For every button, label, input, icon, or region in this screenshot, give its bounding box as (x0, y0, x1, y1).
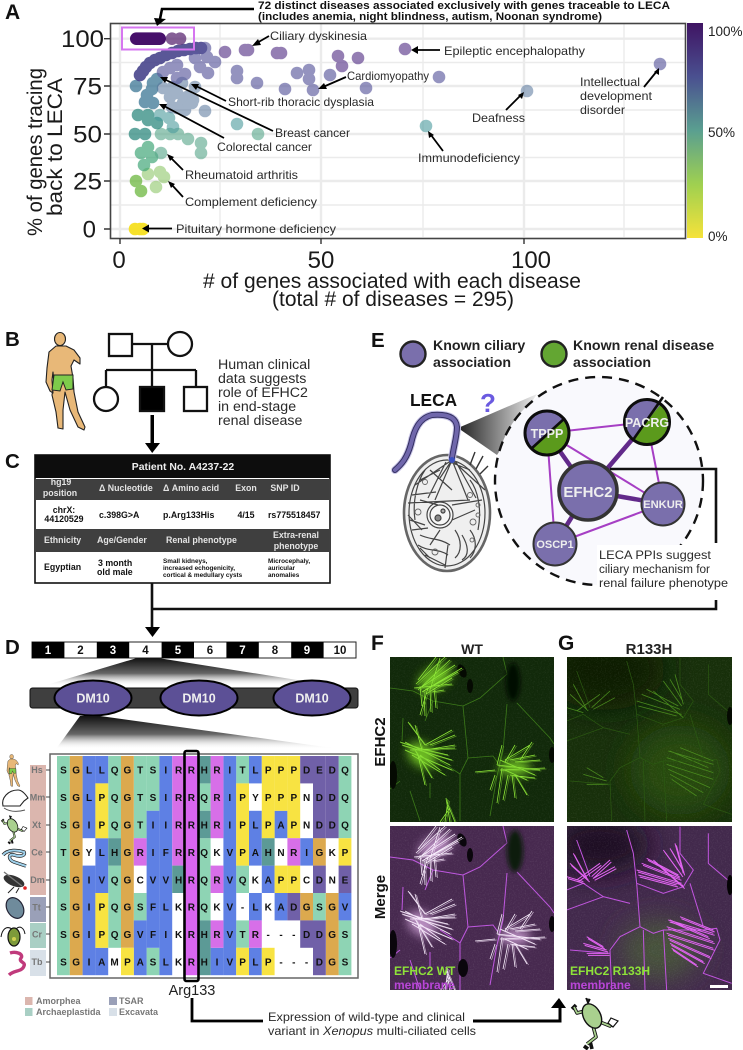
lineage strip and species labels: Tb (32, 957, 43, 967)
connector from EFHC2 to note (610, 469, 716, 543)
headline callout: 72 distinct diseases associated exclusively with genes traceable to LECA (258, 0, 670, 12)
protein bar (30, 688, 358, 708)
disease annotations: Immunodeficiency (418, 151, 520, 165)
table row: variant headings: Δ Amino acid (163, 483, 219, 493)
table row: variant values: p.Arg133His (163, 510, 214, 520)
headline callout: (includes anemia, night blindness, autism, Noonan syndrome) (258, 11, 602, 23)
alignment frame (50, 754, 358, 978)
table row: phenotype values: cortical & medullary cysts (163, 572, 243, 579)
icon: human figure (46, 332, 85, 430)
scatter points (129, 32, 666, 235)
y axis tick labels: 50 (73, 122, 102, 148)
y axis title (23, 68, 67, 236)
micrograph: R133H merge (567, 826, 732, 990)
table row: phenotype headings: phenotype (274, 541, 318, 551)
table row: phenotype values: 3 month (98, 558, 132, 568)
node: OSCP1: OSCP1 (536, 539, 574, 551)
legend: eukaryotic supergroups (25, 996, 159, 1017)
table row: variant values: 44120529 (44, 514, 84, 524)
text: clinical data: renal disease (218, 413, 303, 429)
x axis title (203, 269, 581, 311)
colour bar labels: 50% (708, 125, 735, 140)
micrograph: R133H EFHC2 (567, 657, 732, 822)
row label: Merge: Merge (372, 875, 389, 919)
alignment residues: SGIVQGCVVHRQRVQKAPPCDNE (60, 875, 349, 886)
text: expression note (268, 1010, 476, 1038)
table row: variant values: rs775518457 (268, 510, 320, 520)
node: TPPP: TPPP (531, 427, 563, 441)
y axis tick labels: 25 (73, 168, 102, 196)
axis ticks (104, 39, 524, 244)
micrograph: WT merge (389, 826, 555, 992)
micrograph overlay label: EFHC2 R133H: membrane (570, 978, 631, 992)
table row: phenotype values: increased echogenicity, (163, 565, 235, 572)
text: expression note: variant in Xenopus multi-ciliated cells (268, 1024, 476, 1038)
dashed circle (495, 377, 703, 585)
scale bar (710, 985, 728, 988)
legend: renal (542, 338, 714, 371)
text: PPI note: renal failure phenotype (599, 576, 728, 590)
numbered segment bar: 10 (334, 645, 346, 657)
micrograph overlay label: EFHC2 WT: EFHC2 WT (394, 964, 456, 978)
table title: Patient No. A4237-22 (132, 462, 234, 473)
panel label: A: A (5, 1, 20, 24)
disease annotations: Epileptic encephalopathy (444, 44, 585, 58)
plot border (110, 24, 686, 238)
node: PACRG: PACRG (625, 416, 669, 430)
colour bar (687, 23, 703, 238)
numbered segment bar: 3 (110, 645, 116, 657)
legend: ciliary: Known ciliary (433, 338, 525, 354)
lineage strip and species labels: Xt (32, 820, 41, 830)
basal body (449, 457, 455, 463)
disease annotations: disorder (580, 103, 625, 117)
node: TPPP (525, 411, 570, 456)
disease annotations: Short-rib thoracic dysplasia (228, 95, 374, 109)
icon: Tetrahymena (3, 894, 27, 922)
y axis tick labels: 100 (61, 26, 104, 53)
question mark: ? (480, 388, 496, 418)
legend: ciliary: association (433, 355, 511, 371)
label: LECA: LECA (410, 390, 458, 410)
numbered segment bar: 5 (175, 645, 182, 657)
micrograph overlay label: EFHC2 WT (394, 964, 456, 992)
table row: phenotype headings: Renal phenotype (166, 535, 237, 545)
y axis title: % of genes tracing (23, 68, 47, 236)
table row: variant headings: Δ Nucleotide (99, 483, 153, 493)
table row: variant values: 4/15 (237, 510, 255, 520)
table row: phenotype values: old male (97, 567, 133, 577)
icon: human (7, 755, 20, 787)
table row: phenotype values: anomalies (268, 572, 300, 579)
text: PPI note (597, 545, 728, 593)
micrograph: WT EFHC2 (389, 657, 555, 823)
disease annotations: Complement deficiency (185, 195, 317, 209)
connector arrows from C to D and E (145, 583, 716, 637)
arrow: B to C (145, 415, 160, 453)
alignment residues: TGYLHGRIFRRQKVPAHNRIGKP (60, 848, 349, 859)
disease annotations: Deafness (472, 111, 525, 125)
annotation arrows (148, 36, 657, 228)
text: clinical data: role of EFHC2 (218, 385, 308, 401)
node: ENKUR: ENKUR (643, 499, 683, 511)
alignment residues: SGLPQGTSIRRQRIPYPPPNDDQ (60, 793, 349, 804)
table row: phenotype headings (44, 530, 319, 551)
plot gridlines (111, 24, 685, 237)
heading: WT: WT (461, 641, 483, 657)
table row: variant values (44, 505, 320, 524)
micrograph overlay label: EFHC2 R133H: EFHC2 R133H (570, 964, 650, 978)
x axis tick labels: 100 (511, 247, 551, 274)
x axis title: # of genes associated with each disease (203, 269, 581, 293)
pedigree chart (94, 332, 207, 411)
numbered segment bar: 9 (304, 645, 310, 657)
panel: scatter plot of disease genes (23, 0, 743, 311)
y axis title: back to LECA (43, 77, 67, 216)
lineage strip and species labels (30, 765, 50, 976)
icon: worm (3, 850, 26, 866)
zoom wedge: segment to domains (43, 658, 335, 686)
text: clinical data: Human clinical (218, 357, 310, 373)
legend: eukaryotic supergroups: TSAR (119, 996, 144, 1006)
table row: variant headings: hg19 (51, 477, 71, 487)
disease annotations: Colorectal cancer (217, 140, 312, 154)
panel label: E: E (371, 329, 385, 352)
y axis tick labels: 0 (83, 216, 96, 244)
panel: clinical pedigree (46, 332, 310, 453)
panel label: D: D (5, 636, 20, 659)
panel label: B: B (5, 328, 20, 351)
annotation arrowheads (142, 39, 659, 232)
lineage strip and species labels: Dm (30, 875, 45, 885)
highlight box: 100 percent diseases (122, 28, 194, 50)
panel label: C: C (5, 450, 20, 473)
highlight: Arg133 column (184, 751, 198, 981)
lineage strip and species labels: Cr (32, 930, 42, 940)
table row: variant headings: SNP ID (270, 483, 300, 493)
DM10 domain 3 (274, 680, 350, 716)
node: EFHC2: EFHC2 (563, 484, 613, 501)
icon: mouse (3, 790, 28, 811)
node: ENKUR (642, 482, 684, 526)
zoom cone (458, 394, 537, 455)
text: clinical data (218, 357, 310, 429)
legend: eukaryotic supergroups: Archaeplastida (36, 1007, 102, 1017)
table row: variant headings: position (43, 488, 77, 498)
micrograph overlay label: EFHC2 R133H (570, 964, 650, 992)
lineage strip and species labels: Ce (31, 848, 43, 858)
disease annotations: Breast cancer (275, 126, 350, 140)
icon: frog (2, 816, 27, 844)
panel: EFHC2 domains and alignment (1, 642, 618, 1049)
DM10 domain 1: DM10 (76, 692, 110, 706)
headline callout (154, 0, 670, 26)
row label: EFHC2: EFHC2 (372, 717, 389, 767)
alignment residues: SGLLQGTSIRRHRITLPPPDEDQ (60, 766, 349, 777)
disease annotations: Ciliary dyskinesia (270, 29, 367, 43)
zoom wedge: domain to alignment (56, 716, 340, 749)
x axis tick labels: 50 (308, 247, 334, 274)
disease annotations: Pituitary hormone deficiency (176, 222, 336, 236)
disease annotations: Cardiomyopathy (347, 69, 429, 83)
numbered segment bar: 4 (142, 645, 149, 657)
alignment residues: SGIPQGTIIRRHRIPLPAPNDDQ (60, 820, 349, 832)
DM10 domain 3: DM10 (295, 692, 329, 706)
disease annotations: Intellectual (580, 75, 640, 89)
disease annotations: development (580, 89, 653, 103)
alignment residues: SGIPQGVFIKRHRVTR---DDGS (60, 930, 349, 941)
numbered segment bar: 1 (45, 645, 52, 657)
DM10 domain 1 (54, 680, 132, 716)
lineage strip and species labels: Hs (31, 765, 43, 775)
x axis tick labels: 0 (112, 247, 126, 274)
panel label: F: F (371, 632, 384, 655)
icon: Xenopus frog (572, 998, 618, 1049)
lineage strip and species labels: Mm (30, 792, 45, 802)
colour bar labels: 0% (708, 229, 728, 244)
table row: variant values: c.398G>A (99, 510, 140, 520)
numbered segment bar: 2 (77, 645, 84, 657)
y axis tick labels (61, 26, 104, 244)
icon: Trypanosoma (9, 952, 24, 975)
numbered segment bar: 7 (239, 645, 246, 657)
micrograph overlay label: EFHC2 WT: membrane (394, 978, 455, 992)
table row: phenotype values (44, 558, 310, 579)
node: PACRG (624, 397, 670, 444)
panel: patient table (35, 455, 330, 583)
legend: ciliary (400, 338, 525, 371)
alignment residues: SGIAMPASLKRHIVPLP---DGS (60, 958, 349, 968)
text: expression note: Expression of wild-type and clinical (268, 1010, 465, 1024)
text: clinical data: data suggests (218, 371, 306, 387)
colour bar labels: 100% (708, 24, 743, 39)
legend: eukaryotic supergroups: Amorphea (36, 996, 82, 1006)
table row: phenotype values: auricular (268, 565, 296, 572)
numbered segment bar: 8 (272, 645, 279, 657)
legend: renal: association (573, 355, 651, 371)
disease annotations: Rheumatoid arthritis (185, 168, 298, 182)
table row: variant values: chrX: (53, 505, 75, 515)
x axis title: (total # of diseases = 295) (272, 287, 514, 311)
icon: fly (2, 872, 27, 893)
alignment colour cells (57, 756, 351, 975)
table header (35, 455, 330, 478)
table row: phenotype headings: Ethnicity (44, 535, 81, 545)
legend: eukaryotic supergroups: Excavata (119, 1007, 159, 1017)
colour bar labels (708, 24, 743, 244)
flagellum (395, 415, 457, 470)
text: clinical data: in end-stage (218, 399, 296, 415)
LECA cell drawing (404, 452, 490, 571)
table row: phenotype headings: Extra-renal (273, 530, 319, 540)
network edges (547, 422, 663, 544)
disease annotations (176, 29, 653, 236)
numbered segment bar: 6 (207, 645, 213, 657)
alignment residues (60, 766, 349, 968)
legend: renal: Known renal disease (573, 338, 714, 354)
panel label: G: G (558, 632, 574, 655)
table row: phenotype values: Egyptian (44, 562, 81, 572)
table row: phenotype values: Small kidneys, (163, 558, 208, 565)
heading: R133H: R133H (626, 641, 672, 658)
text: PPI note: ciliary mechanism for (599, 562, 710, 576)
panel: LECA network (395, 338, 728, 593)
text: PPI note: LECA PPIs suggest (599, 548, 712, 562)
table row: phenotype values: Microcephaly, (268, 558, 310, 565)
table row: variant headings (43, 477, 300, 498)
table row: phenotype headings: Age/Gender (97, 535, 147, 545)
alignment residues: SGIPQGSFLKRQKV-LKADGSGV (60, 903, 349, 914)
DM10 domain 2: DM10 (182, 692, 216, 706)
node: EFHC2 (559, 462, 617, 520)
x axis tick labels (112, 247, 551, 274)
lineage strip and species labels: Tt (32, 902, 41, 912)
y axis tick labels: 75 (73, 74, 102, 100)
icon: Chlamydomonas (1, 927, 25, 946)
DM10 domain 2 (160, 680, 238, 716)
node: OSCP1 (534, 522, 576, 566)
arrow: alignment to microscopy (192, 998, 566, 1021)
table row: variant headings: Exon (235, 483, 257, 493)
numbered segment bar (32, 642, 356, 658)
label: Arg133: Arg133 (169, 983, 215, 999)
